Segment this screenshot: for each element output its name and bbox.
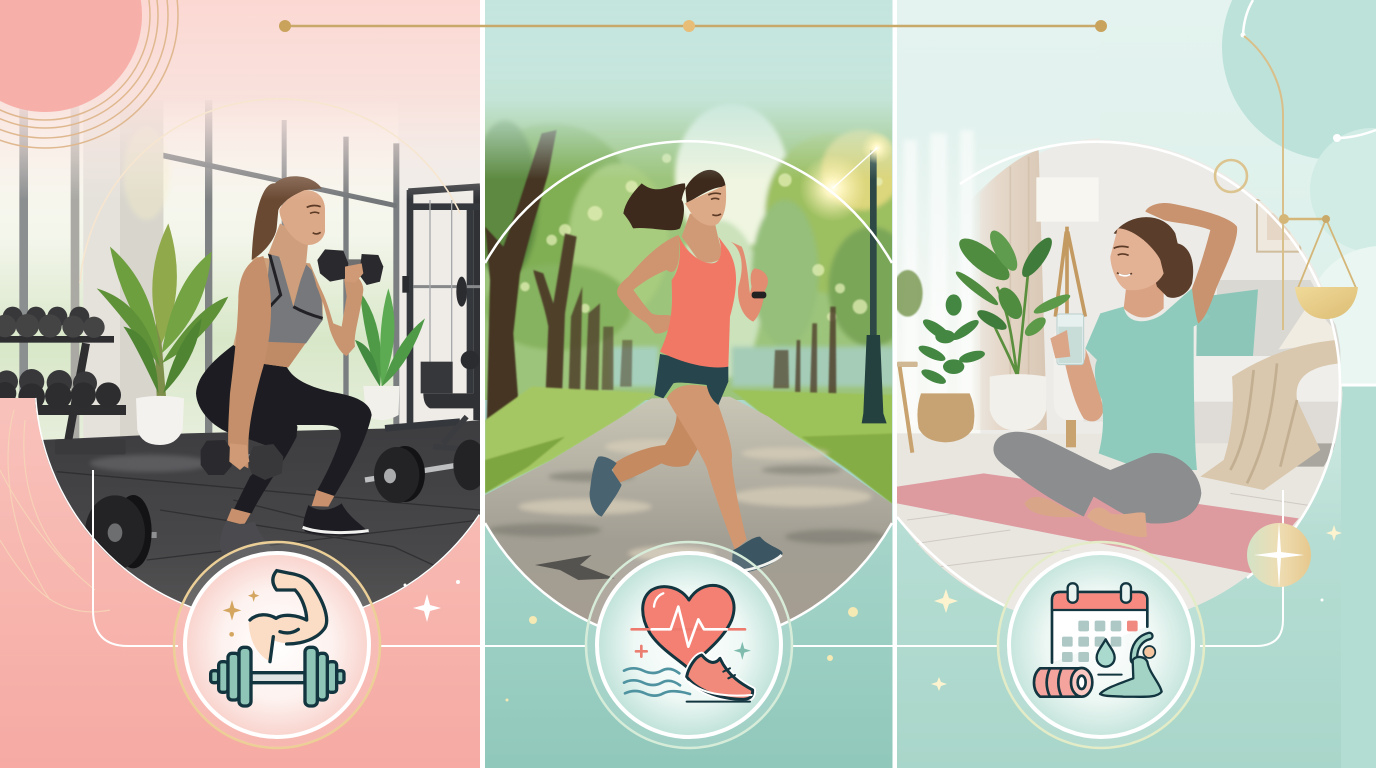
low arm [228,256,271,468]
raised arm and yoga figure [1100,636,1162,697]
leggings [196,345,372,514]
woman seated with water [993,203,1237,537]
face [685,185,726,226]
raised arm [1145,203,1237,323]
sparkles [404,580,460,622]
top-right circles [1222,0,1376,384]
leggings [993,432,1201,524]
lens glow dots [506,607,858,702]
side table and sprig [893,270,923,453]
panel: recovery [893,0,1376,768]
hair [1114,217,1193,298]
window mullions [19,100,399,440]
panel: cardio [472,0,915,768]
floor lamp [1036,177,1099,317]
blanket [1200,340,1339,490]
sofa [1054,280,1340,467]
low dumbbell [201,440,283,480]
facial features [1114,246,1132,276]
gym photo [0,56,480,608]
neck [268,224,308,282]
back shoe [221,520,270,552]
wall art [1257,200,1300,252]
icon badge: calendar, roll and yoga [998,542,1204,748]
left grass [485,387,655,493]
left arm [617,235,679,334]
raised arm [315,273,363,356]
neck and chest [682,213,723,263]
white curtains [904,130,974,430]
sparkles [931,525,1342,691]
back shoe [590,456,622,517]
large plant [953,227,1072,431]
hand [229,443,249,470]
curtain area [897,0,1100,520]
back foot [1024,497,1080,517]
face [1110,228,1164,290]
connector elbow [93,470,178,646]
park photo [485,104,892,624]
top gold timeline [279,20,1107,32]
gold sparkle disc [1247,522,1311,588]
floor plant [97,223,228,445]
sports bra [263,253,323,343]
photo circle line [897,142,1340,606]
shadow of runner [535,555,615,580]
back leg [612,413,700,483]
neck [1124,280,1164,317]
dumbbell shelves [0,307,126,454]
top-left circle ornament [0,0,178,148]
top fade [485,0,893,180]
face [279,190,325,245]
icon badge: muscle and dumbbell [174,542,380,748]
weight rack [385,187,480,450]
panel dividers [480,0,897,768]
wall inside circle [980,138,1344,433]
sun flare [799,132,893,222]
small plant in basket [917,294,986,442]
running path [485,396,892,624]
dappled shade [488,465,885,544]
dappled light [518,439,872,561]
tank top [660,235,736,368]
photo arc line [485,141,892,263]
barbell on floor [365,440,487,503]
yoga mat [897,473,1299,573]
trunks [485,130,836,423]
shorts [654,354,728,405]
front shoe [732,537,783,574]
icon drawing [1034,583,1162,697]
top fade [0,0,480,200]
right grass shade [802,434,892,504]
icon drawing [211,571,344,706]
right lower block [1341,385,1376,768]
beige curtain [970,150,1047,430]
right arm [727,240,768,322]
pink corner arcs [0,410,110,612]
glass [1050,314,1084,365]
right step line [1341,384,1376,386]
lower arc edges [485,523,892,645]
front foot [1087,507,1147,537]
white edge on photo [35,398,480,624]
floor [897,433,1344,683]
connector lines between icons [380,645,998,647]
floor [42,420,480,608]
facial features [307,205,321,234]
gold ring [1215,160,1247,192]
icon badge: heart and shoe [586,542,792,748]
panel: strength [0,0,487,768]
left grass shade [485,437,565,493]
front shoe [303,503,368,536]
front leg [667,385,747,550]
second plant [355,288,425,420]
balance scale [1279,214,1358,319]
white corner strokes [1240,0,1376,142]
bokeh highlights [520,154,883,321]
woman running [590,170,783,574]
foliage [472,103,915,387]
gold connector line [1244,36,1283,330]
facial features [708,193,721,216]
home photo [893,130,1344,683]
raised dumbbell [317,249,383,285]
circular arc above gym figure [80,99,460,283]
water arm [1064,348,1104,421]
shirt [1085,288,1210,470]
ankles [227,508,251,525]
ponytail [623,170,726,230]
torso skin [233,257,323,367]
right grass [732,390,898,508]
lamp post [862,150,887,423]
hair [252,176,322,260]
icon drawing [624,585,753,702]
dumbbell on floor [85,495,157,570]
white connector [1200,490,1283,646]
woman lunging with dumbbells [196,176,383,556]
